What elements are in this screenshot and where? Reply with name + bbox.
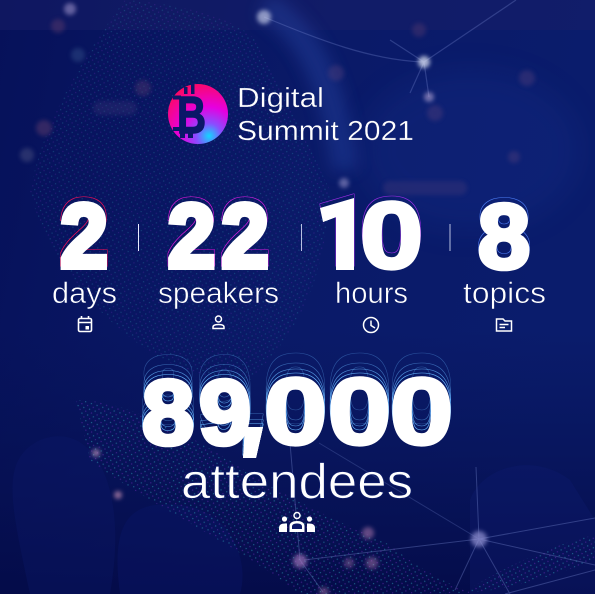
stacked outlines behind number: 0 bbox=[328, 356, 391, 462]
dotted wave upper bbox=[30, 0, 330, 381]
number 89,000: 9 bbox=[199, 361, 251, 464]
stat: 8 topics bbox=[463, 181, 546, 331]
stacked outlines behind number: 0 bbox=[264, 352, 327, 458]
number 22 bbox=[168, 186, 269, 287]
stacked outlines behind number: 0 bbox=[328, 346, 391, 452]
divider bbox=[301, 224, 302, 251]
number 10 bbox=[320, 198, 420, 271]
divider bbox=[450, 224, 451, 251]
stacked outlines behind number: 0 bbox=[328, 352, 391, 458]
logo wordmark bbox=[237, 82, 414, 146]
stat: 2 days bbox=[52, 182, 117, 332]
icon: group of people bbox=[279, 512, 315, 532]
stacked outlines behind number: 8 bbox=[142, 338, 194, 441]
stacked outlines behind number: 9 bbox=[199, 358, 251, 461]
logo: Digital Summit 2021 bbox=[168, 82, 414, 146]
stat: 10 hours bbox=[320, 194, 421, 334]
number 22 outline bbox=[168, 182, 269, 283]
stacked outlines behind number: 8 bbox=[142, 348, 194, 451]
stacked outlines behind number: 9 bbox=[199, 348, 251, 451]
logo wordmark: Summit 2021 bbox=[237, 115, 414, 146]
logo mark: bitcoin B in gradient circle: B bbox=[177, 87, 206, 145]
icon: person bbox=[213, 316, 224, 328]
label: days: days bbox=[52, 277, 117, 310]
logo wordmark: Digital bbox=[237, 82, 324, 113]
network lines bbox=[264, 0, 595, 594]
stacked outlines behind number: 0 bbox=[264, 346, 327, 452]
logo mark: bitcoin B in gradient circle bbox=[168, 83, 228, 145]
stacked outlines behind number: 0 bbox=[390, 346, 453, 452]
number 10: 1 bbox=[320, 187, 370, 287]
number 22: 2 bbox=[168, 186, 215, 287]
stacked outlines behind number: 8 bbox=[142, 354, 194, 457]
icon: calendar bbox=[78, 316, 92, 332]
stacked outlines behind number: 0 bbox=[264, 356, 327, 462]
number 10 outline: 0 bbox=[360, 179, 423, 285]
number 89,000: 0 bbox=[264, 359, 327, 465]
number 89,000: 0 bbox=[390, 359, 453, 465]
label: speakers: speakers bbox=[158, 277, 279, 310]
stacked outlines behind number: 0 bbox=[390, 336, 453, 442]
number 22 outline: 2 bbox=[168, 182, 215, 283]
number 10 outline bbox=[320, 179, 423, 285]
number 8: 8 bbox=[478, 185, 530, 288]
label: attendees: attendees bbox=[181, 455, 413, 509]
number 89,000: 8 bbox=[142, 361, 194, 464]
number 2: 2 bbox=[60, 186, 108, 287]
number 22: 2 bbox=[221, 186, 269, 287]
divider bbox=[138, 224, 139, 251]
stacked outlines behind number: 0 bbox=[328, 336, 391, 442]
icon: folder bbox=[496, 319, 512, 331]
icon: clock bbox=[364, 318, 378, 332]
stat: 89,000 attendees bbox=[142, 336, 453, 532]
stacked outlines behind number bbox=[142, 336, 453, 462]
number 89,000: 0 bbox=[328, 359, 391, 465]
stat: 22 speakers bbox=[158, 182, 279, 328]
number 10: 0 bbox=[360, 183, 423, 289]
stacked outlines behind number: 0 bbox=[264, 336, 327, 442]
number 89,000: , bbox=[236, 362, 272, 463]
stacked outlines behind number: 0 bbox=[390, 356, 453, 462]
stacked outlines behind number: 0 bbox=[390, 352, 453, 458]
stacked outlines behind number: 8 bbox=[142, 358, 194, 461]
stacked outlines behind number: 9 bbox=[199, 354, 251, 457]
label: hours: hours bbox=[335, 277, 408, 310]
number 2 outline: 2 bbox=[60, 182, 108, 283]
stacked outlines behind number: 9 bbox=[199, 338, 251, 441]
label: topics: topics bbox=[463, 277, 546, 310]
dotted wave lower bbox=[76, 400, 595, 594]
number 89,000 bbox=[142, 376, 450, 458]
number 22 outline: 2 bbox=[221, 182, 269, 283]
number 8 outline: 8 bbox=[478, 181, 530, 284]
